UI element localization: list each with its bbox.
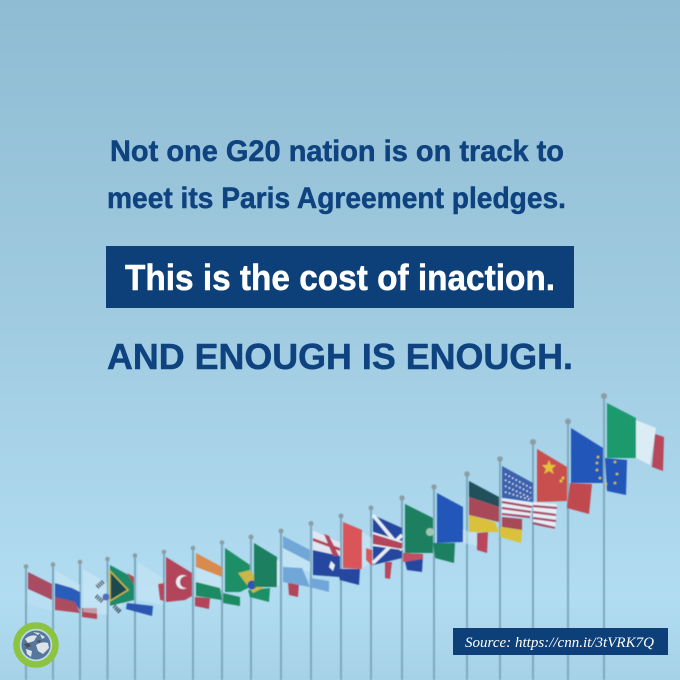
flag: France (343, 522, 392, 579)
flag: Italy (607, 403, 664, 471)
headline (107, 135, 566, 215)
source box (453, 628, 668, 655)
flag: Canada (138, 562, 164, 605)
banner (106, 246, 574, 308)
flag: South Africa (110, 565, 153, 616)
source text: Source: https://cnn.it/3tVRK7Q (465, 635, 654, 651)
banner bar (106, 246, 574, 308)
flag: United States (502, 466, 557, 530)
flag: Saudi Arabia (405, 504, 455, 563)
flag: Mexico (254, 543, 299, 597)
line two: meet its Paris Agreement pledges. (107, 182, 566, 215)
flag poles (24, 393, 607, 680)
flag: Brazil (225, 548, 270, 602)
flag: Turkey (166, 557, 210, 609)
icon: earth logo (16, 626, 56, 664)
line one: Not one G20 nation is on track to (110, 135, 564, 168)
flag: China (537, 449, 592, 514)
flag: Argentina (283, 536, 329, 592)
flag: European Union (571, 428, 627, 495)
flag: India (196, 553, 240, 606)
banner text: This is the cost of inaction. (125, 257, 555, 298)
flag: Germany (469, 481, 522, 543)
flag: South Korea (83, 569, 122, 615)
closing statement: AND ENOUGH IS ENOUGH. (107, 336, 573, 377)
source label (453, 628, 668, 655)
flags row (28, 403, 664, 619)
flag: Australia (313, 530, 360, 585)
flag: European blue (437, 493, 488, 553)
flag: Russia (55, 570, 97, 619)
flag: Indonesia (28, 572, 52, 612)
flag: United Kingdom (373, 515, 423, 572)
